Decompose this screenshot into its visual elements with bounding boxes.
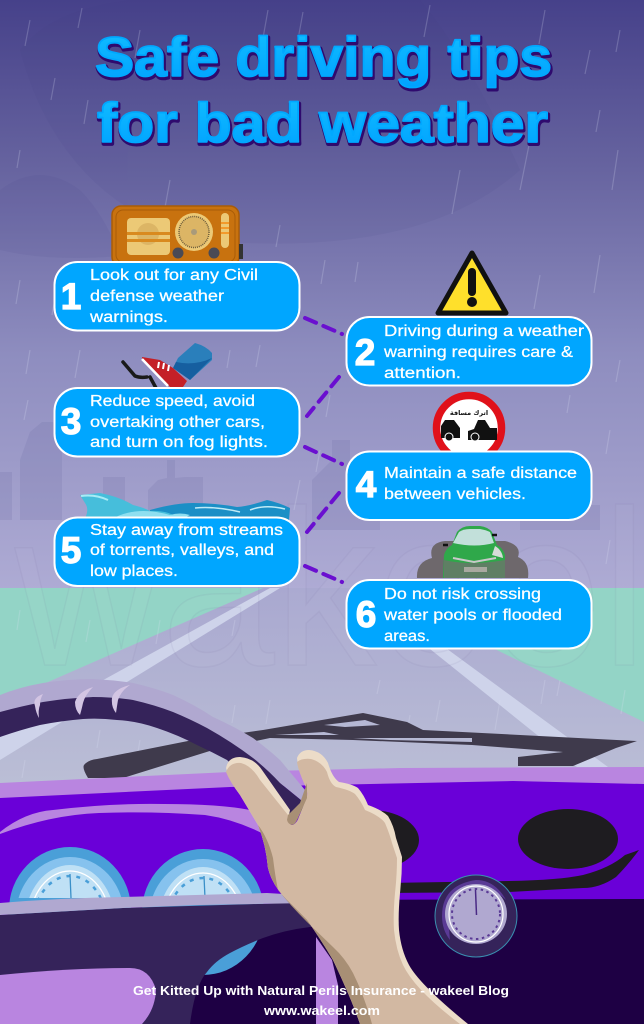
text: tip 3: [90, 393, 268, 451]
hand: [226, 750, 468, 1024]
text: tip 1: [89, 267, 258, 326]
wheel spoke rim: [0, 893, 310, 915]
title: Safe driving tips: [96, 27, 553, 90]
city silhouette: [0, 422, 600, 530]
text: tip 3: and turn on fog lights.: [90, 434, 268, 451]
windshield wiper: [84, 713, 637, 778]
cloud shapes: [0, 0, 520, 258]
number 4: 4: [356, 464, 377, 505]
text: tip 2: [383, 323, 584, 382]
wheel spoke: [0, 903, 400, 1024]
road markings: [0, 588, 608, 767]
text: tip 1: Look out for any Civil: [90, 267, 258, 284]
gauge right clock: [435, 875, 517, 957]
footer: [133, 983, 509, 1018]
lilac panel: [0, 968, 156, 1024]
text: tip 5: of torrents, valleys, and: [90, 542, 274, 559]
text: tip 5: Stay away from streams: [90, 522, 283, 539]
title: for bad weather: [98, 93, 549, 156]
text: tip 4: between vehicles.: [384, 486, 526, 503]
icon: car in flood: [417, 526, 528, 578]
text: tip 1: warnings.: [89, 309, 168, 326]
number 1: 1: [61, 276, 81, 317]
panel: tip 6: [346, 580, 592, 648]
steering wheel: [0, 679, 400, 1024]
panel: tip 3: [54, 388, 300, 456]
wheel finger grips: [34, 685, 130, 718]
text: tip 3: Reduce speed, avoid: [90, 393, 255, 410]
text: tip 6: [383, 586, 562, 645]
dashboard trim: [0, 804, 275, 840]
ground: [0, 588, 644, 788]
air vent left: [321, 810, 419, 870]
number 2: 2: [355, 332, 375, 373]
title: Safe driving tips: [95, 25, 552, 88]
title: for bad weather: [97, 91, 548, 154]
connectors: [305, 318, 342, 582]
gauge left: [10, 847, 131, 914]
text: tip 2: Driving during a weather: [384, 323, 584, 340]
text: tip 6: areas.: [384, 628, 430, 645]
text: tip 4: [384, 465, 577, 503]
lower dashboard: [150, 899, 644, 1024]
text: tip 2: attention.: [384, 365, 461, 382]
text: tip 1: defense weather: [90, 288, 224, 305]
icon: foot on pedal: [123, 343, 212, 388]
dashboard: [0, 767, 644, 1024]
text: tip 6: Do not risk crossing: [384, 586, 541, 603]
text: tip 6: water pools or flooded: [383, 607, 562, 624]
steering column: [316, 937, 338, 1024]
number 3: 3: [61, 401, 81, 442]
dashboard trim swoosh: [385, 850, 639, 893]
road: [0, 588, 644, 800]
gauge centre: [142, 849, 264, 981]
text: tip 3: overtaking other cars,: [90, 414, 265, 431]
icon: radio: [112, 206, 243, 266]
text: tip 2: warning requires care &: [383, 344, 574, 361]
panel: tip 2: [346, 317, 592, 386]
title: [95, 25, 553, 156]
rain: [16, 5, 625, 778]
icon: flood water: [80, 493, 290, 520]
icon: warning sign: [438, 253, 506, 313]
text: tip 4: Maintain a safe distance: [384, 465, 577, 482]
panel: tip 5: [54, 518, 300, 586]
icon: no-overtaking distance sign: [436, 396, 502, 460]
panel: tip 1: [54, 262, 300, 330]
air vent right: [518, 809, 618, 869]
footer: www.wakeel.com: [263, 1003, 380, 1018]
text: tip 5: [90, 522, 283, 580]
panel: tip 4: [346, 452, 592, 520]
number 6: 6: [356, 594, 376, 635]
number 5: 5: [61, 530, 81, 571]
footer: Get Kitted Up with Natural Perils Insurance - wakeel Blog: [133, 983, 509, 998]
text: tip 5: low places.: [90, 563, 178, 580]
sky background: [0, 0, 644, 590]
icon: no-overtaking distance sign: اترك مسافة: [450, 409, 488, 417]
